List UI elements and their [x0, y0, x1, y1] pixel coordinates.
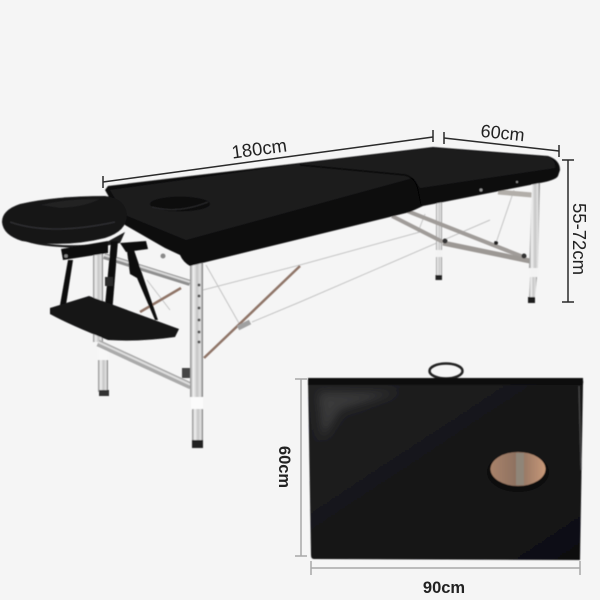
dimension: 60cm [444, 121, 559, 157]
dimension: 180cm: 180cm [230, 135, 288, 163]
case top edge [308, 378, 583, 385]
face cradle [2, 196, 127, 248]
dimension: 55-72cm [562, 160, 590, 302]
wires [147, 190, 514, 325]
case body [308, 379, 583, 560]
dimension: 55-72cm: 55-72cm [569, 203, 590, 275]
dimension: case 60cm: 60cm [275, 446, 293, 488]
near right leg [528, 180, 540, 303]
leather highlight [318, 392, 400, 440]
foot shelf [50, 296, 179, 341]
side arm rest [250, 204, 365, 246]
table top [105, 147, 560, 266]
left braces [98, 255, 300, 386]
handle [430, 364, 462, 378]
dimension: case 90cm [311, 561, 580, 597]
massage table [2, 147, 560, 448]
hole with wood view [487, 452, 549, 492]
folded table case [308, 364, 583, 560]
dimension: case 60cm [275, 379, 307, 556]
dimension: 180cm [103, 130, 433, 188]
back left leg [93, 250, 109, 396]
dimension: 60cm: 60cm [480, 121, 526, 145]
face hole [150, 196, 210, 212]
front left leg [190, 263, 203, 448]
far right leg [436, 200, 442, 280]
dimension: case 90cm: 90cm [423, 579, 465, 597]
right braces [392, 192, 532, 261]
cradle bracket and straps [60, 241, 166, 338]
